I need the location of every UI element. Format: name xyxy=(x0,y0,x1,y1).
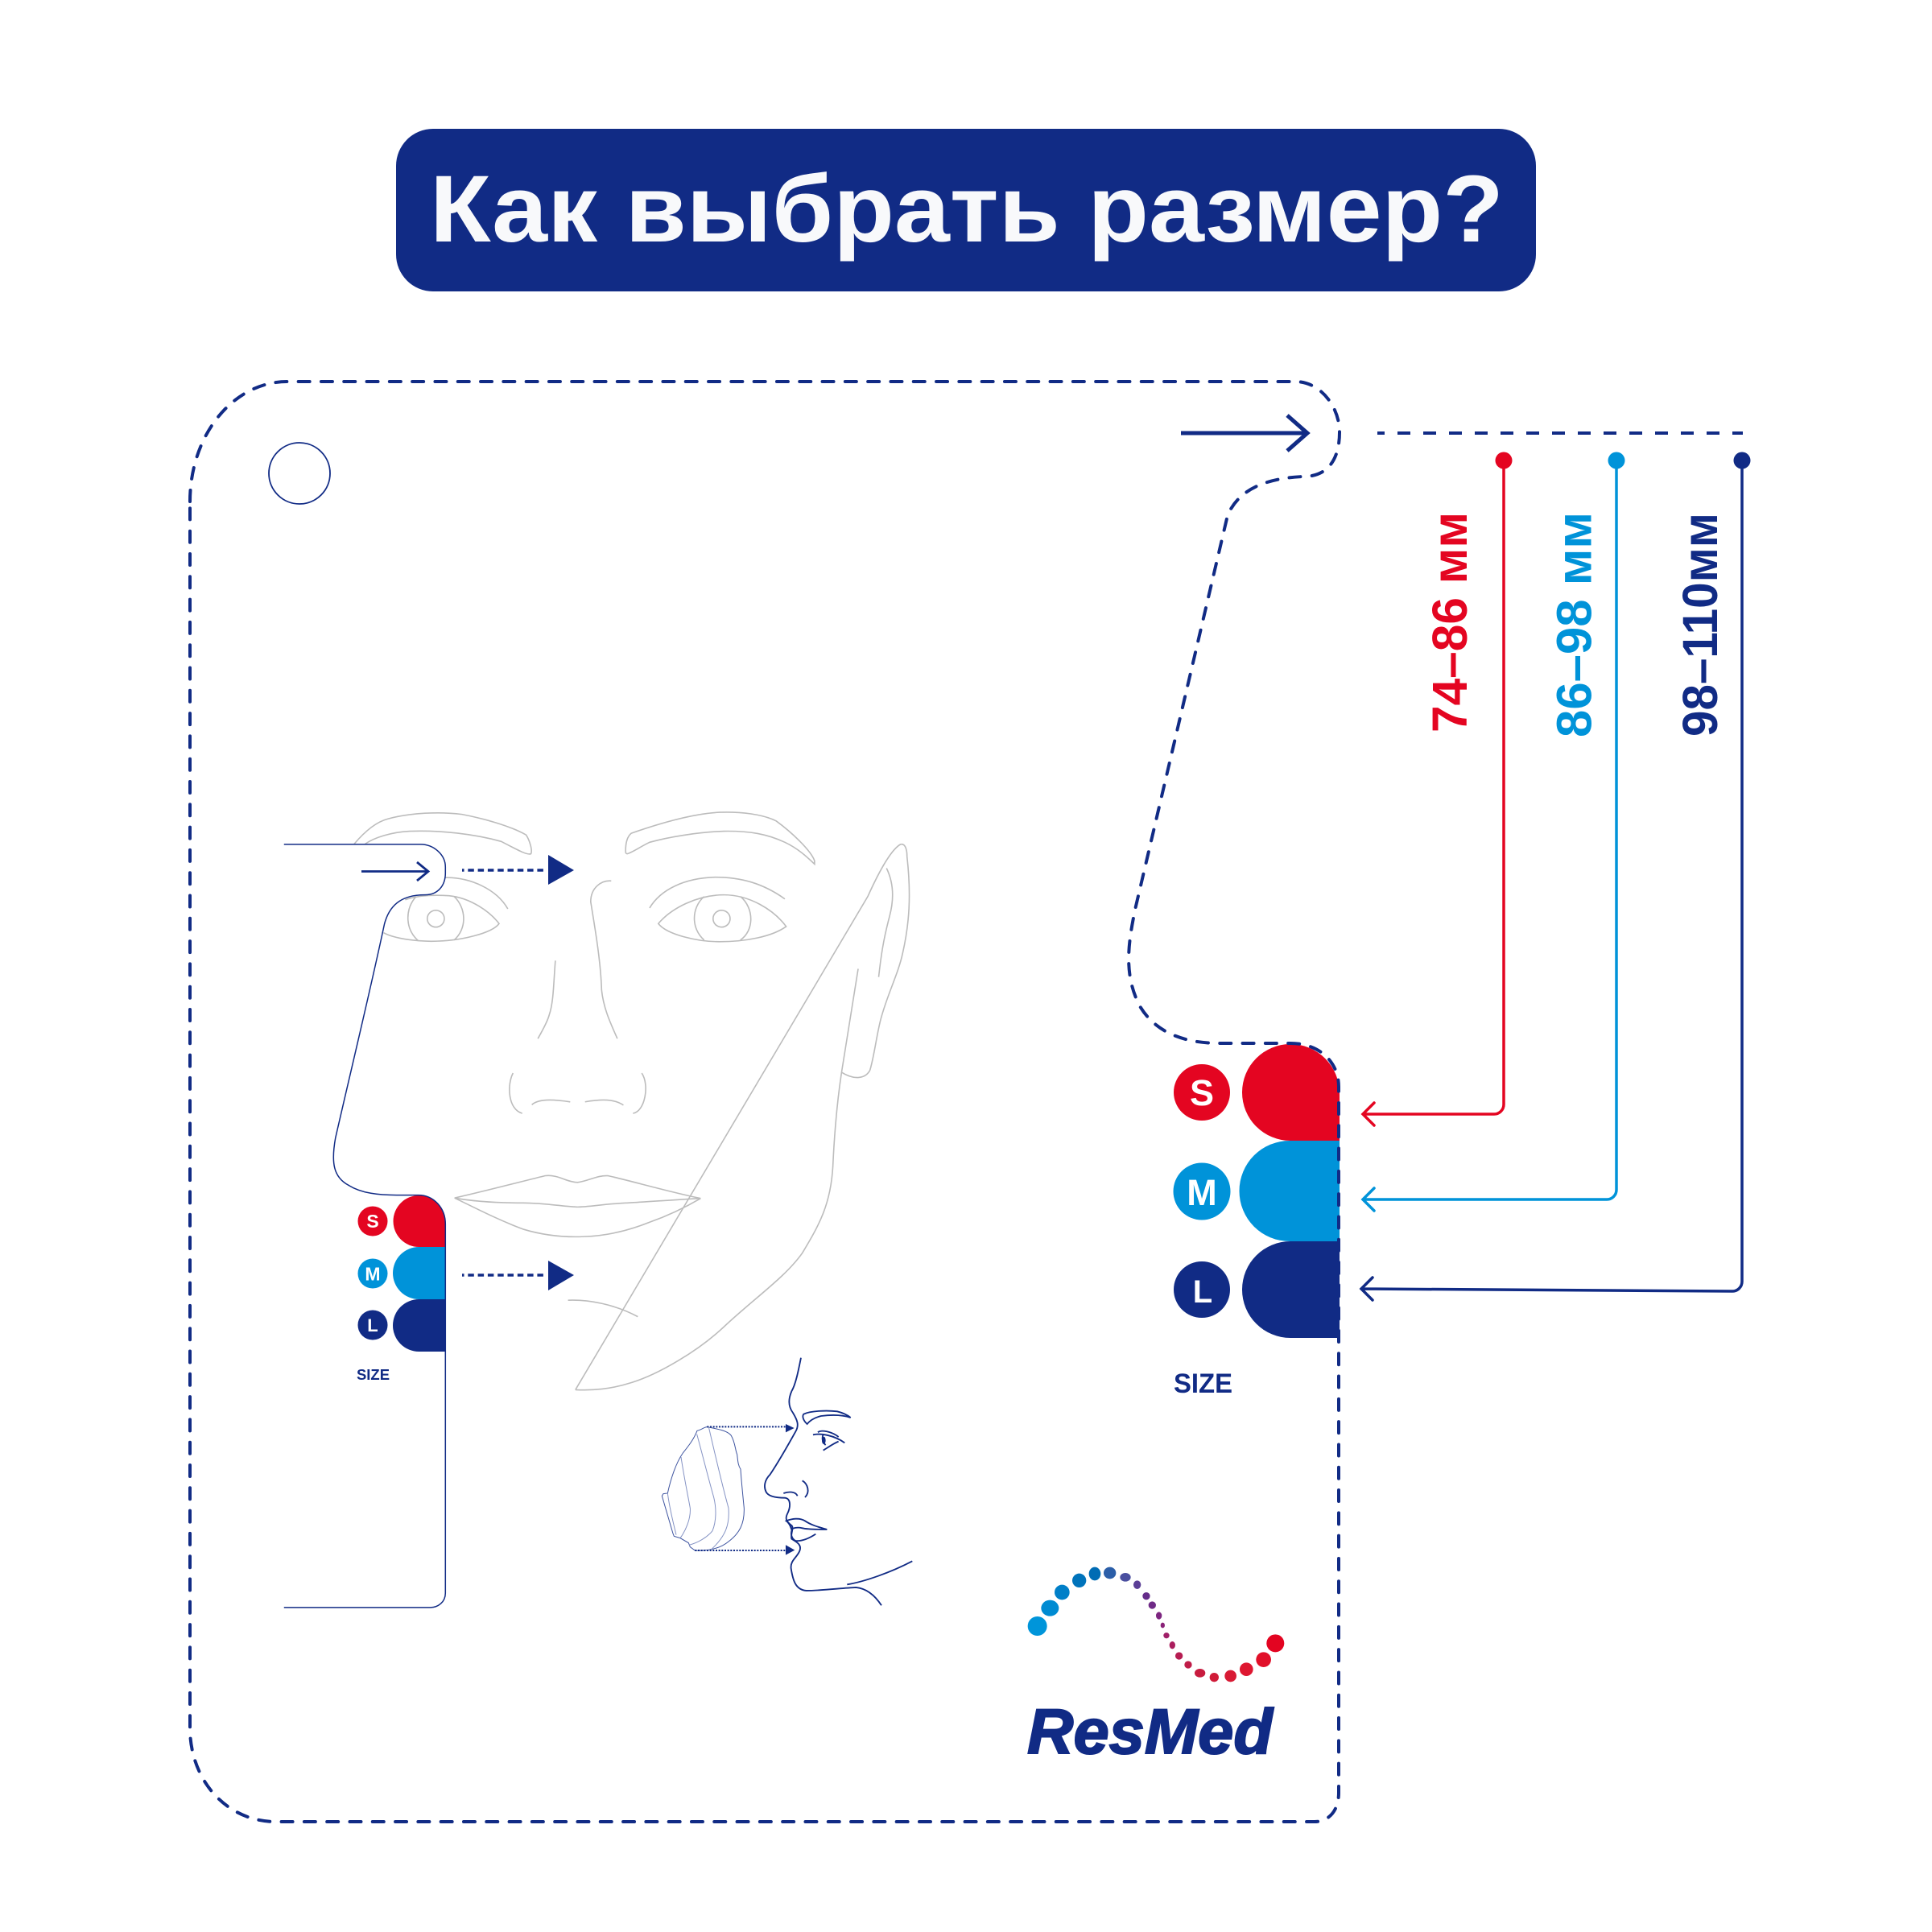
front face line drawing xyxy=(354,812,910,1390)
callout: small size 74-86 mm xyxy=(1363,452,1512,1125)
dashed cut outline xyxy=(190,382,1340,1822)
small size caption: SIZE xyxy=(357,1366,390,1383)
size badge S xyxy=(1174,1064,1230,1121)
small badge M: M xyxy=(365,1264,381,1285)
size caption: SIZE xyxy=(1174,1368,1232,1399)
small badge M xyxy=(357,1259,388,1288)
small badge S: S xyxy=(366,1211,379,1232)
small badge S xyxy=(357,1206,388,1236)
logo: ResMed xyxy=(1027,1567,1284,1767)
size badge L xyxy=(1174,1261,1230,1318)
hole circle xyxy=(269,443,330,504)
dotted arrow top xyxy=(462,855,574,885)
callout: medium size 86-98 mm xyxy=(1363,452,1624,1211)
label M range: 86–98 мм xyxy=(1547,512,1602,737)
size pads large xyxy=(1240,1044,1340,1338)
side profile with mask xyxy=(662,1358,912,1605)
contour line xyxy=(284,844,445,1608)
size badge M xyxy=(1174,1162,1230,1220)
mask pointer bottom xyxy=(695,1545,795,1555)
panel: large cushion sizing template xyxy=(190,382,1340,1822)
size badge M: M xyxy=(1187,1172,1217,1213)
title text: Как выбрать размер? xyxy=(430,156,1504,262)
size pads small xyxy=(393,1195,446,1352)
small badge L xyxy=(357,1311,388,1340)
dashed measure line xyxy=(1377,431,1743,435)
title banner xyxy=(396,129,1536,291)
callout: large size 98-110 mm xyxy=(1361,452,1750,1300)
label L range: 98–110мм xyxy=(1673,513,1728,737)
mask pointer top xyxy=(707,1424,795,1432)
size badge L: L xyxy=(1193,1274,1212,1310)
insert arrow xyxy=(1181,415,1307,451)
small badge L: L xyxy=(367,1315,378,1335)
size badge S: S xyxy=(1190,1072,1214,1113)
profile face xyxy=(765,1358,912,1605)
panel: cushion contour over face xyxy=(284,844,574,1608)
nasal mask cushion xyxy=(662,1427,744,1550)
logo wordmark: ResMed xyxy=(1027,1695,1274,1767)
logo dots wave xyxy=(1028,1567,1284,1682)
label S range: 74–86 мм xyxy=(1422,512,1477,733)
dotted arrow bottom xyxy=(462,1261,574,1290)
small insert arrow xyxy=(361,862,428,881)
